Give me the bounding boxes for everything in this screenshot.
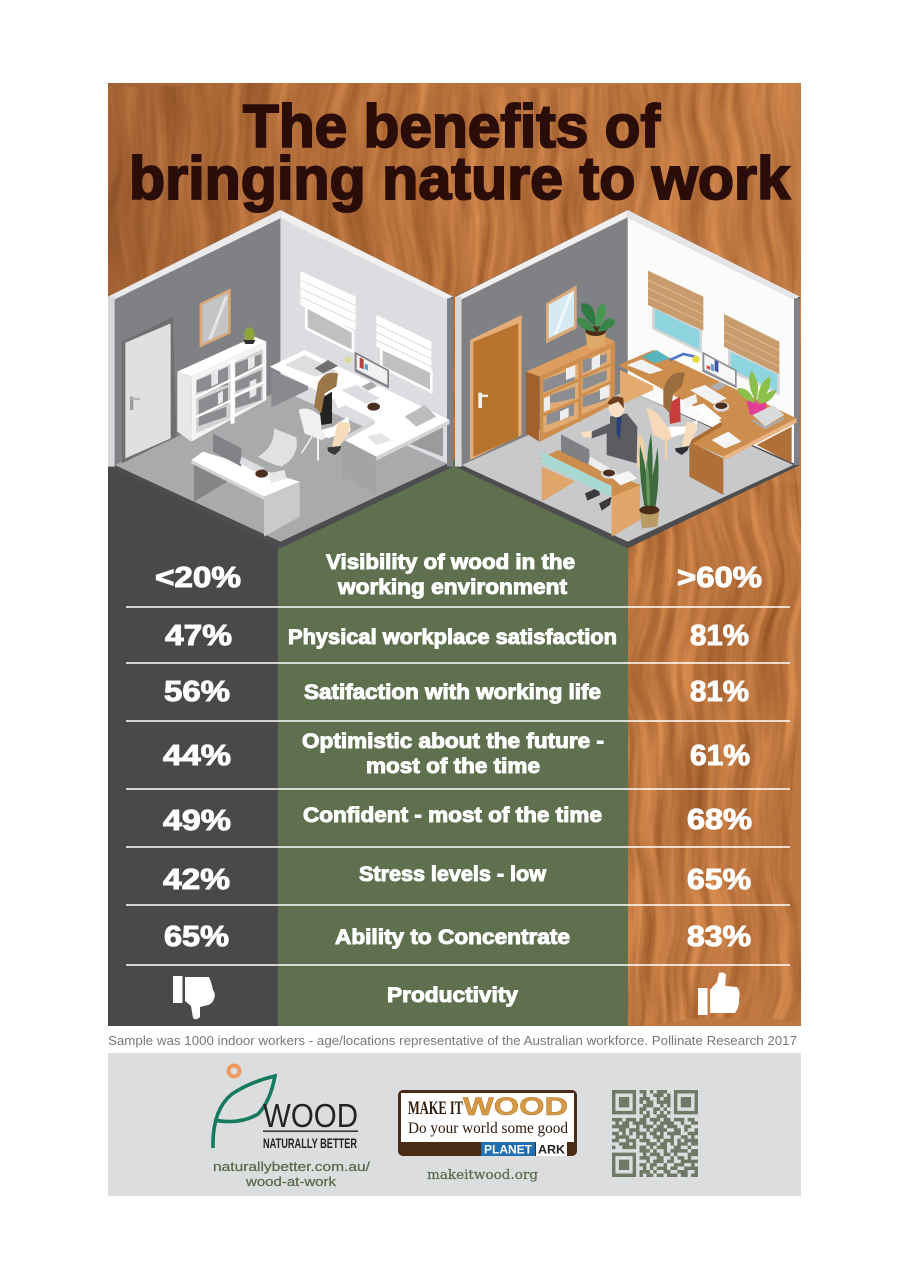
logo: make it wood: ARK bbox=[538, 1142, 565, 1156]
icon: thumbs up bbox=[698, 972, 740, 1015]
icon: thumbs down bbox=[173, 976, 215, 1019]
title: The benefits of bbox=[243, 93, 661, 160]
door bbox=[470, 315, 522, 460]
centre column labels bbox=[288, 551, 617, 1007]
right column values: 81% bbox=[690, 620, 749, 652]
centre column labels: Ability to Concentrate bbox=[335, 926, 570, 949]
seated man bbox=[581, 396, 645, 511]
logo: make it wood: MAKE IT bbox=[408, 1098, 463, 1119]
url: naturally better: naturallybetter.com.au/ bbox=[213, 1159, 370, 1174]
monitor and lamp bbox=[670, 352, 737, 391]
room: office without wood bbox=[108, 210, 453, 548]
centre column labels: Stress levels - low bbox=[359, 863, 547, 886]
QR code bbox=[612, 1090, 698, 1177]
title: bringing nature to work bbox=[129, 145, 791, 212]
L-shaped desk bbox=[270, 350, 450, 495]
right column values: >60% bbox=[677, 562, 762, 594]
url: naturally better bbox=[213, 1159, 370, 1189]
centre column labels: Productivity bbox=[387, 984, 518, 1007]
centre column labels: Physical workplace satisfaction bbox=[288, 626, 617, 649]
logo: make it wood bbox=[398, 1090, 577, 1156]
right column values: 68% bbox=[687, 804, 752, 836]
divider lines bbox=[126, 607, 790, 965]
centre column labels: most of the time bbox=[366, 755, 540, 778]
wood background panel bbox=[108, 83, 801, 1026]
monitor bbox=[345, 352, 389, 391]
bookshelf bbox=[177, 327, 266, 442]
centre column labels: working environment bbox=[337, 576, 567, 599]
left column values: <20% bbox=[155, 562, 241, 594]
seated woman bbox=[299, 373, 351, 461]
logo: make it wood: PLANET bbox=[484, 1142, 533, 1156]
logo: wood naturally better: NATURALLY BETTER bbox=[263, 1135, 357, 1151]
empty chair bbox=[258, 428, 297, 467]
right column values bbox=[677, 562, 762, 953]
mirror bbox=[546, 285, 577, 343]
url: make it wood: makeitwood.org bbox=[427, 1168, 538, 1183]
shelf plant bbox=[577, 303, 616, 348]
green column background bbox=[278, 458, 628, 1026]
left column values bbox=[155, 562, 241, 953]
source note: Sample was 1000 indoor workers - age/locations representative of the Australian workforce. Pollinate Research 2017 bbox=[108, 1034, 797, 1048]
small desk bbox=[191, 433, 300, 537]
floor plant bbox=[639, 433, 659, 528]
url: naturally better: wood-at-work bbox=[245, 1174, 337, 1189]
logo: make it wood: WOOD bbox=[463, 1093, 568, 1121]
logo: wood naturally better: WOOD bbox=[263, 1097, 358, 1134]
left column values: 42% bbox=[163, 864, 230, 896]
small desk bbox=[540, 434, 640, 537]
left column values: 56% bbox=[164, 676, 230, 708]
right column values: 81% bbox=[690, 676, 749, 708]
logo: make it wood: Do your world some good bbox=[408, 1120, 568, 1137]
footer panel bbox=[108, 1053, 801, 1196]
centre column labels: Visibility of wood in the bbox=[326, 551, 575, 574]
window blinds and windows bbox=[648, 271, 779, 393]
door bbox=[122, 317, 176, 463]
left column values: 49% bbox=[163, 805, 231, 837]
left column values: 65% bbox=[164, 921, 229, 953]
centre column labels: Confident - most of the time bbox=[303, 804, 602, 827]
right column values: 61% bbox=[690, 740, 750, 772]
left column values: 47% bbox=[165, 620, 232, 652]
pink pot plant and books bbox=[737, 371, 784, 429]
seated woman bbox=[647, 372, 697, 461]
centre column labels: Satifaction with working life bbox=[304, 681, 601, 704]
right column values: 83% bbox=[687, 921, 751, 953]
bookshelf bbox=[526, 337, 615, 442]
dark column background bbox=[108, 460, 278, 1026]
title bbox=[129, 93, 791, 212]
centre column labels: Optimistic about the future - bbox=[302, 730, 604, 753]
left column values: 44% bbox=[163, 740, 231, 772]
mirror bbox=[200, 288, 231, 348]
window blinds and windows bbox=[300, 271, 431, 392]
L-shaped desk bbox=[618, 350, 797, 495]
room: office with wood bbox=[455, 210, 800, 548]
right column values: 65% bbox=[687, 864, 751, 896]
logo: wood naturally better bbox=[213, 1066, 358, 1151]
